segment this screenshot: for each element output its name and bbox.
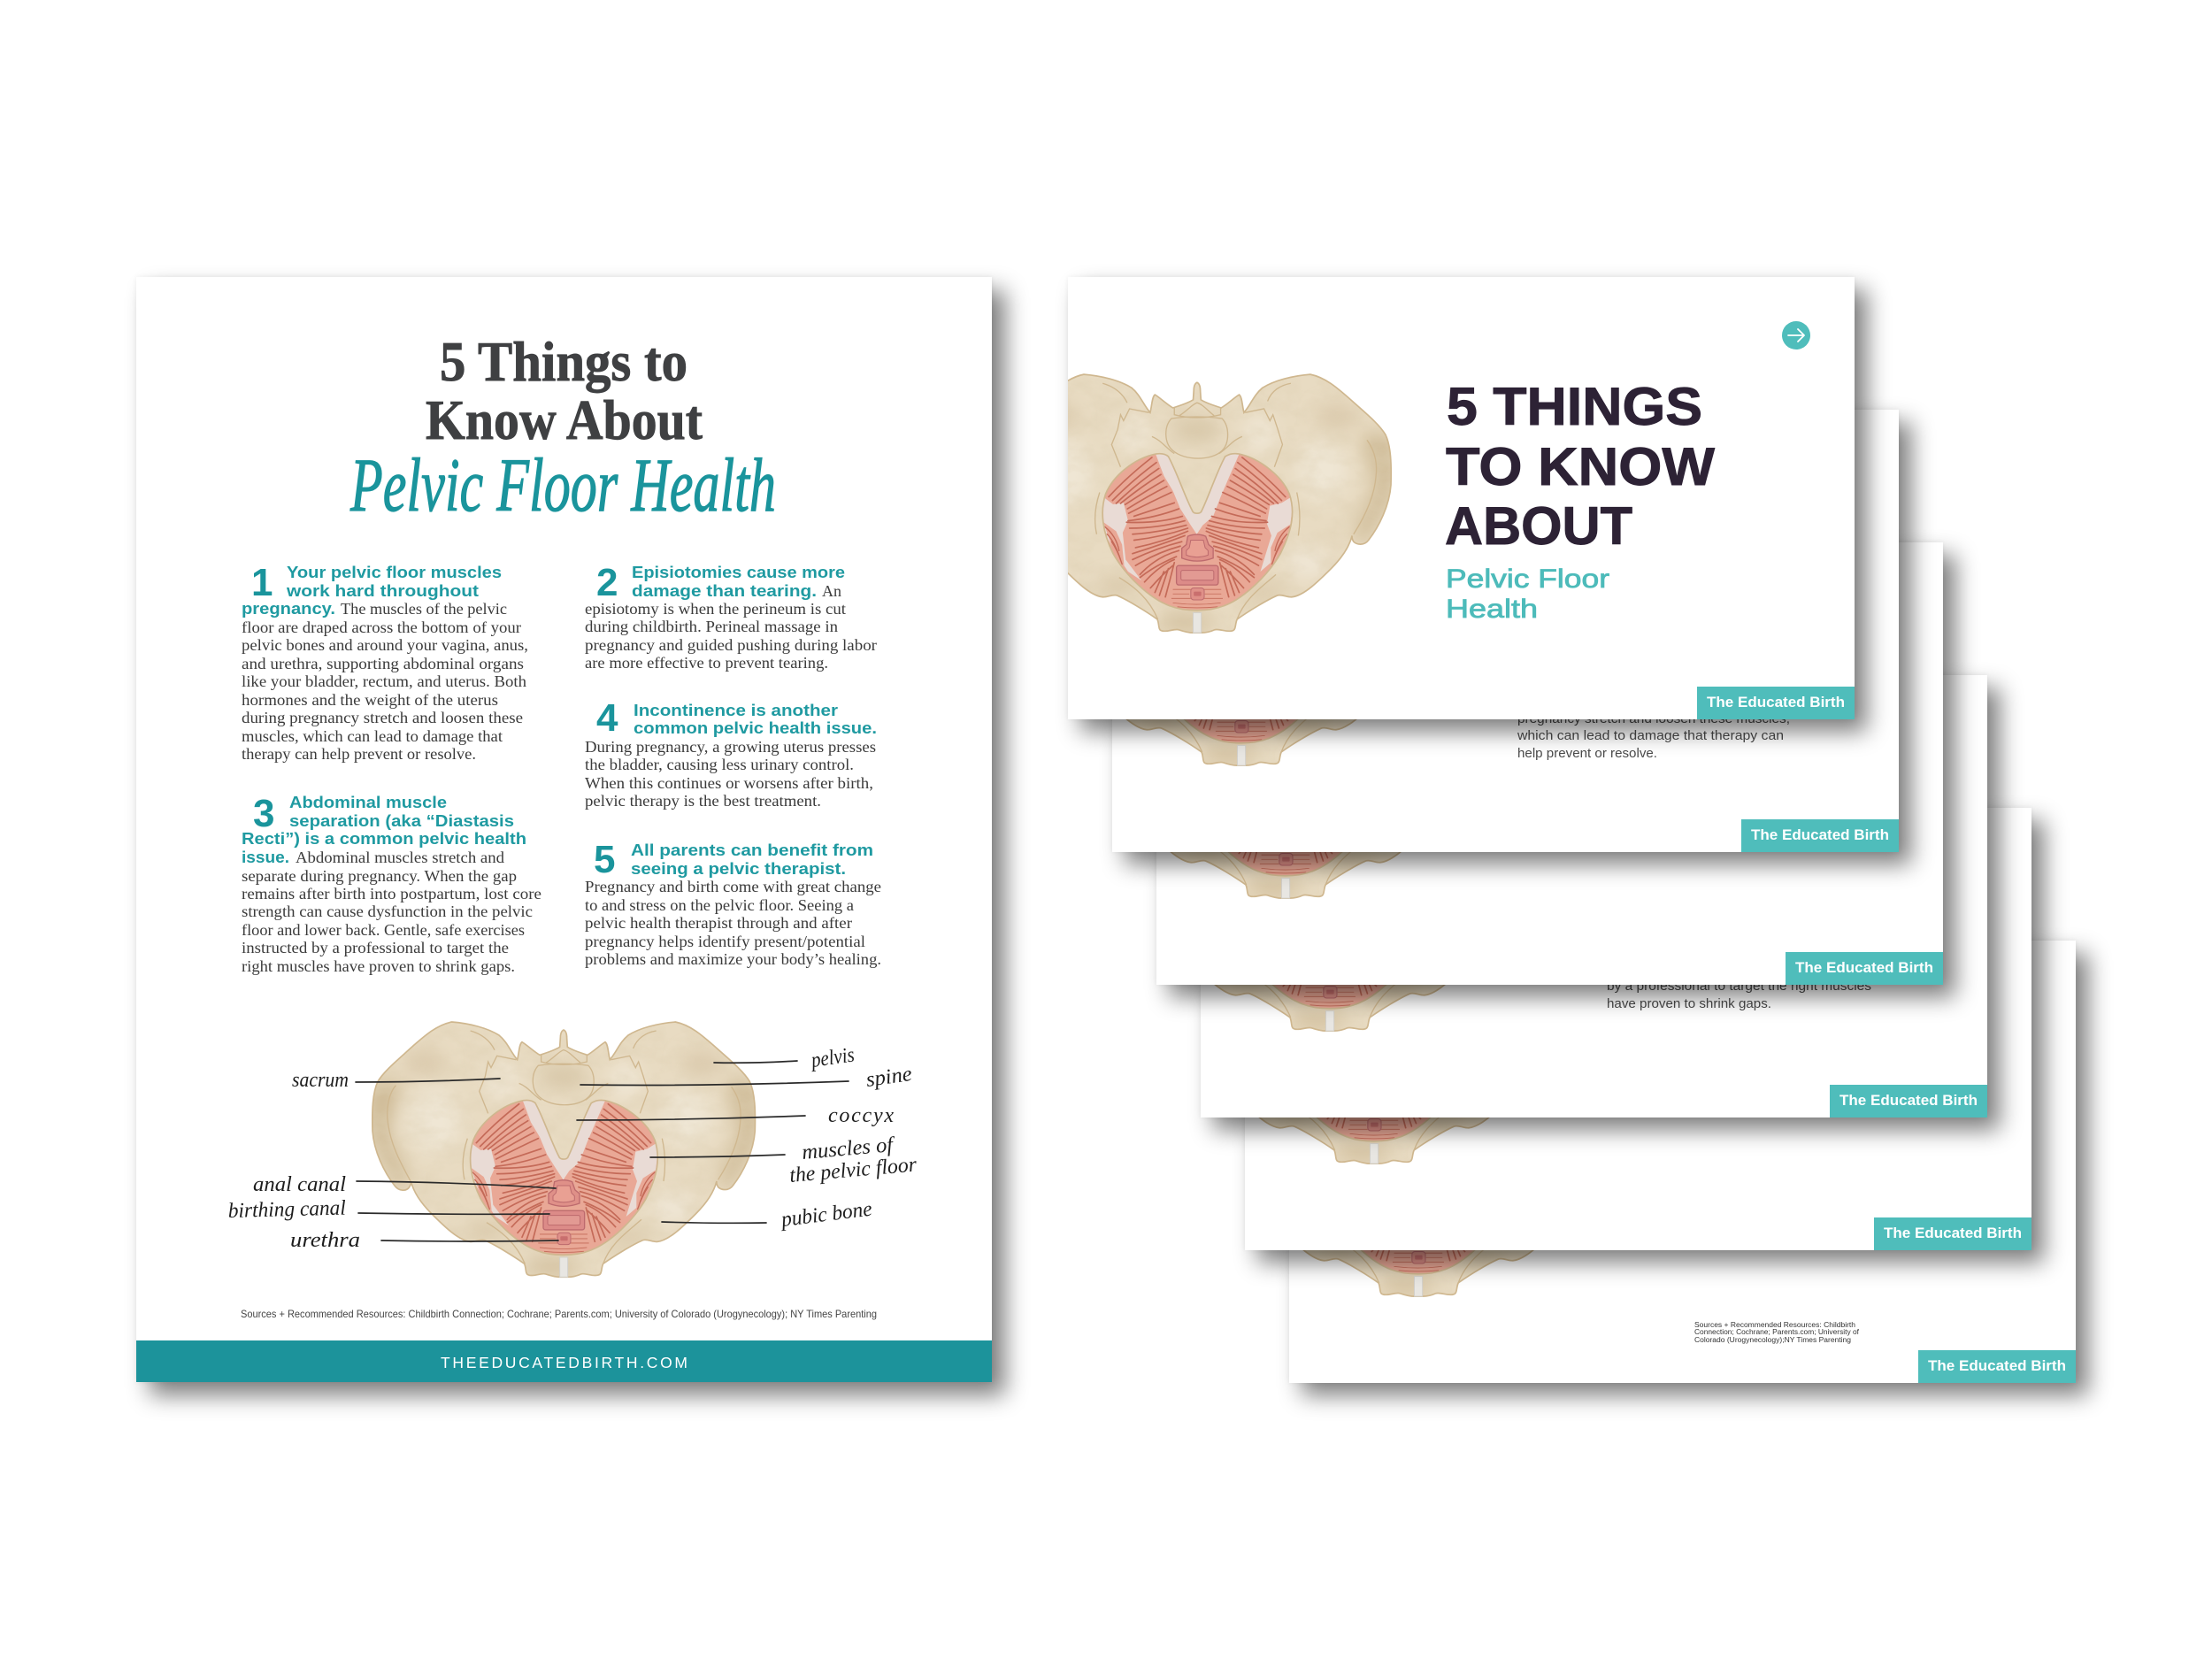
text block: item 4: the bladder, causing less urinary control. bbox=[585, 756, 854, 773]
text block: item 5: to and stress on the pelvic floor. Seeing a bbox=[585, 896, 854, 914]
body text: have proven to shrink gaps. bbox=[1607, 997, 1771, 1011]
text block: item 1 bbox=[242, 561, 528, 763]
text block: item 3: Recti”) is a common pelvic health bbox=[242, 829, 526, 848]
text block: item 2: Episiotomies cause more bbox=[632, 563, 845, 581]
text block: item 1: like your bladder, rectum, and uterus. Both bbox=[242, 672, 526, 690]
slide subheading bbox=[1446, 565, 1609, 624]
footer bar: THEEDUCATEDBIRTH.COM bbox=[441, 1354, 687, 1371]
text block: item 4: 4 bbox=[596, 696, 618, 740]
text block: item 3: strength can cause dysfunction in the pelvic bbox=[242, 902, 533, 920]
brand tag: The Educated Birth bbox=[1839, 1092, 1978, 1109]
slide 4 bbox=[1133, 675, 2000, 1130]
sources text bbox=[1694, 1321, 1860, 1344]
text block: item 1: floor are draped across the bottom of your bbox=[242, 618, 521, 636]
text block: item 5: seeing a pelvic therapist. bbox=[631, 859, 846, 878]
text block: item 3: separation (aka “Diastasis bbox=[289, 811, 514, 830]
title: Pelvic Floor Health bbox=[349, 442, 776, 527]
slide 1 bbox=[1000, 277, 1867, 732]
slide subheading: Pelvic Floor bbox=[1446, 565, 1609, 594]
text block: item 1: work hard throughout bbox=[286, 581, 479, 600]
brand tag bbox=[1786, 952, 1943, 985]
slide heading: ABOUT bbox=[1445, 496, 1632, 556]
slide 2 bbox=[1044, 410, 1911, 864]
sources text: Sources + Recommended Resources: Childbirth bbox=[1694, 1321, 1855, 1329]
brand tag bbox=[1741, 819, 1899, 852]
text block: item 4 bbox=[585, 696, 877, 810]
text block: item 5: 5 bbox=[594, 838, 615, 881]
illustration: pelvis bbox=[369, 1019, 758, 1281]
brand tag: The Educated Birth bbox=[1751, 826, 1889, 843]
illustration: pelvis bbox=[1302, 1250, 1534, 1297]
text block: item 3: issue. bbox=[242, 848, 289, 866]
text block: item 1: therapy can help prevent or resolve. bbox=[242, 745, 476, 763]
body text: pregnancy stretch and loosen these muscles, bbox=[1517, 712, 1790, 726]
body text: by a professional to target the right muscles bbox=[1607, 979, 1871, 994]
text block: item 2 bbox=[585, 561, 877, 672]
text block: item 4: Incontinence is another bbox=[634, 701, 838, 719]
illustration: pelvis bbox=[1214, 985, 1446, 1032]
brand tag bbox=[1830, 1085, 1987, 1118]
illustration: pelvis bbox=[1258, 1118, 1490, 1164]
panel: handout page bbox=[136, 277, 1005, 1395]
text block: item 1: pregnancy. bbox=[242, 599, 335, 618]
brand tag: The Educated Birth bbox=[1928, 1357, 2066, 1374]
text block: item 2: during childbirth. Perineal massage in bbox=[585, 618, 838, 635]
handwritten labels: pubic bone bbox=[779, 1198, 873, 1232]
illustration: pelvis bbox=[1068, 373, 1393, 634]
brand tag bbox=[1697, 687, 1855, 719]
handwritten labels: birthing canal bbox=[227, 1197, 346, 1223]
brand tag: The Educated Birth bbox=[1707, 694, 1845, 710]
text block: item 5: problems and maximize your body’s healing. bbox=[585, 950, 881, 968]
text block: item 3: right muscles have proven to shrink gaps. bbox=[242, 957, 515, 975]
text block: item 1: 1 bbox=[251, 561, 273, 604]
text block: item 2: episiotomy is when the perineum is cut bbox=[585, 600, 846, 618]
handwritten labels bbox=[227, 1043, 918, 1252]
handwritten labels: coccyx bbox=[828, 1104, 894, 1127]
handwritten labels: pelvis bbox=[808, 1043, 856, 1072]
text block: item 1: hormones and the weight of the uterus bbox=[242, 691, 498, 709]
text block: item 3: instructed by a professional to target the bbox=[242, 939, 509, 956]
text block: item 4: common pelvic health issue. bbox=[634, 718, 877, 737]
text block: item 3: separate during pregnancy. When the gap bbox=[242, 867, 517, 885]
sources text: Colorado (Urogynecology);NY Times Parenting bbox=[1694, 1336, 1851, 1344]
text block: item 2: damage than tearing. bbox=[632, 581, 817, 600]
text block: item 3: remains after birth into postpartum, lost core bbox=[242, 885, 541, 902]
slide 5 bbox=[1177, 808, 2044, 1263]
text block: item 3 bbox=[242, 792, 541, 975]
handwritten labels: urethra bbox=[290, 1229, 360, 1252]
illustration: pelvis bbox=[1170, 852, 1402, 899]
handwritten labels: spine bbox=[864, 1063, 914, 1092]
body text bbox=[1517, 712, 1790, 761]
slide heading: 5 THINGS bbox=[1447, 377, 1702, 436]
slide heading: TO KNOW bbox=[1446, 437, 1715, 496]
icon: arrow button bbox=[1782, 321, 1810, 349]
body text: help prevent or resolve. bbox=[1517, 747, 1657, 761]
sources text: Connection; Cochrane; Parents.com; University of bbox=[1694, 1328, 1860, 1336]
text block: item 1: Your pelvic floor muscles bbox=[287, 563, 502, 581]
slide 3 bbox=[1088, 542, 1955, 997]
text block: item 1: pelvic bones and around your vagina, anus, bbox=[242, 636, 528, 654]
brand tag: The Educated Birth bbox=[1795, 959, 1933, 976]
text block: item 5: pelvic health therapist through and after bbox=[585, 914, 852, 932]
text block: item 4: During pregnancy, a growing uterus presses bbox=[585, 738, 876, 756]
handwritten labels: the pelvic floor bbox=[788, 1153, 918, 1187]
title: 5 Things to bbox=[440, 330, 687, 393]
slide heading bbox=[1445, 377, 1715, 556]
footer bar bbox=[136, 1340, 992, 1382]
text block: item 3: 3 bbox=[253, 792, 274, 835]
body text bbox=[1607, 979, 1871, 1011]
slide subheading: Health bbox=[1446, 595, 1538, 624]
handwritten labels: muscles of bbox=[801, 1133, 897, 1164]
text block: item 5: All parents can benefit from bbox=[631, 841, 873, 859]
title bbox=[349, 330, 776, 527]
brand tag: The Educated Birth bbox=[1884, 1225, 2022, 1241]
handwritten labels: anal canal bbox=[253, 1173, 346, 1196]
body text: which can lead to damage that therapy can bbox=[1517, 729, 1784, 743]
text block: item 1: during pregnancy stretch and loosen these bbox=[242, 709, 523, 726]
slide 6 bbox=[1221, 941, 2088, 1395]
illustration: pelvis bbox=[1125, 719, 1357, 766]
text block: item 5 bbox=[585, 838, 881, 968]
brand tag bbox=[1918, 1350, 2076, 1383]
leader lines bbox=[356, 1061, 849, 1241]
text block: item 3: Abdominal muscles stretch and bbox=[296, 849, 504, 866]
text block: item 2: pregnancy and guided pushing during labor bbox=[585, 636, 877, 654]
text block: item 3: Abdominal muscle bbox=[289, 793, 447, 811]
text block: item 1: The muscles of the pelvic bbox=[341, 600, 507, 618]
text block: item 2: are more effective to prevent tearing. bbox=[585, 654, 828, 672]
text block: item 5: Pregnancy and birth come with great change bbox=[585, 878, 881, 895]
text block: item 1: muscles, which can lead to damage that bbox=[242, 727, 503, 745]
title: Know About bbox=[426, 388, 703, 451]
text block: item 1: and urethra, supporting abdominal organs bbox=[242, 655, 524, 672]
text block: item 2: 2 bbox=[596, 561, 618, 604]
text block: item 4: pelvic therapy is the best treatment. bbox=[585, 792, 821, 810]
brand tag bbox=[1874, 1217, 2032, 1250]
handwritten labels: sacrum bbox=[292, 1069, 349, 1092]
pelvis diagram with labels bbox=[227, 1019, 918, 1281]
text block: item 4: When this continues or worsens after birth, bbox=[585, 774, 873, 792]
text block: item 3: floor and lower back. Gentle, safe exercises bbox=[242, 921, 525, 939]
text block: item 2: An bbox=[822, 582, 841, 600]
sources: Sources + Recommended Resources: Childbirth Connection; Cochrane; Parents.com; University of Colorado (Urogynecology); NY Times Parenting bbox=[241, 1308, 877, 1320]
text block: item 5: pregnancy helps identify present/potential bbox=[585, 933, 865, 950]
